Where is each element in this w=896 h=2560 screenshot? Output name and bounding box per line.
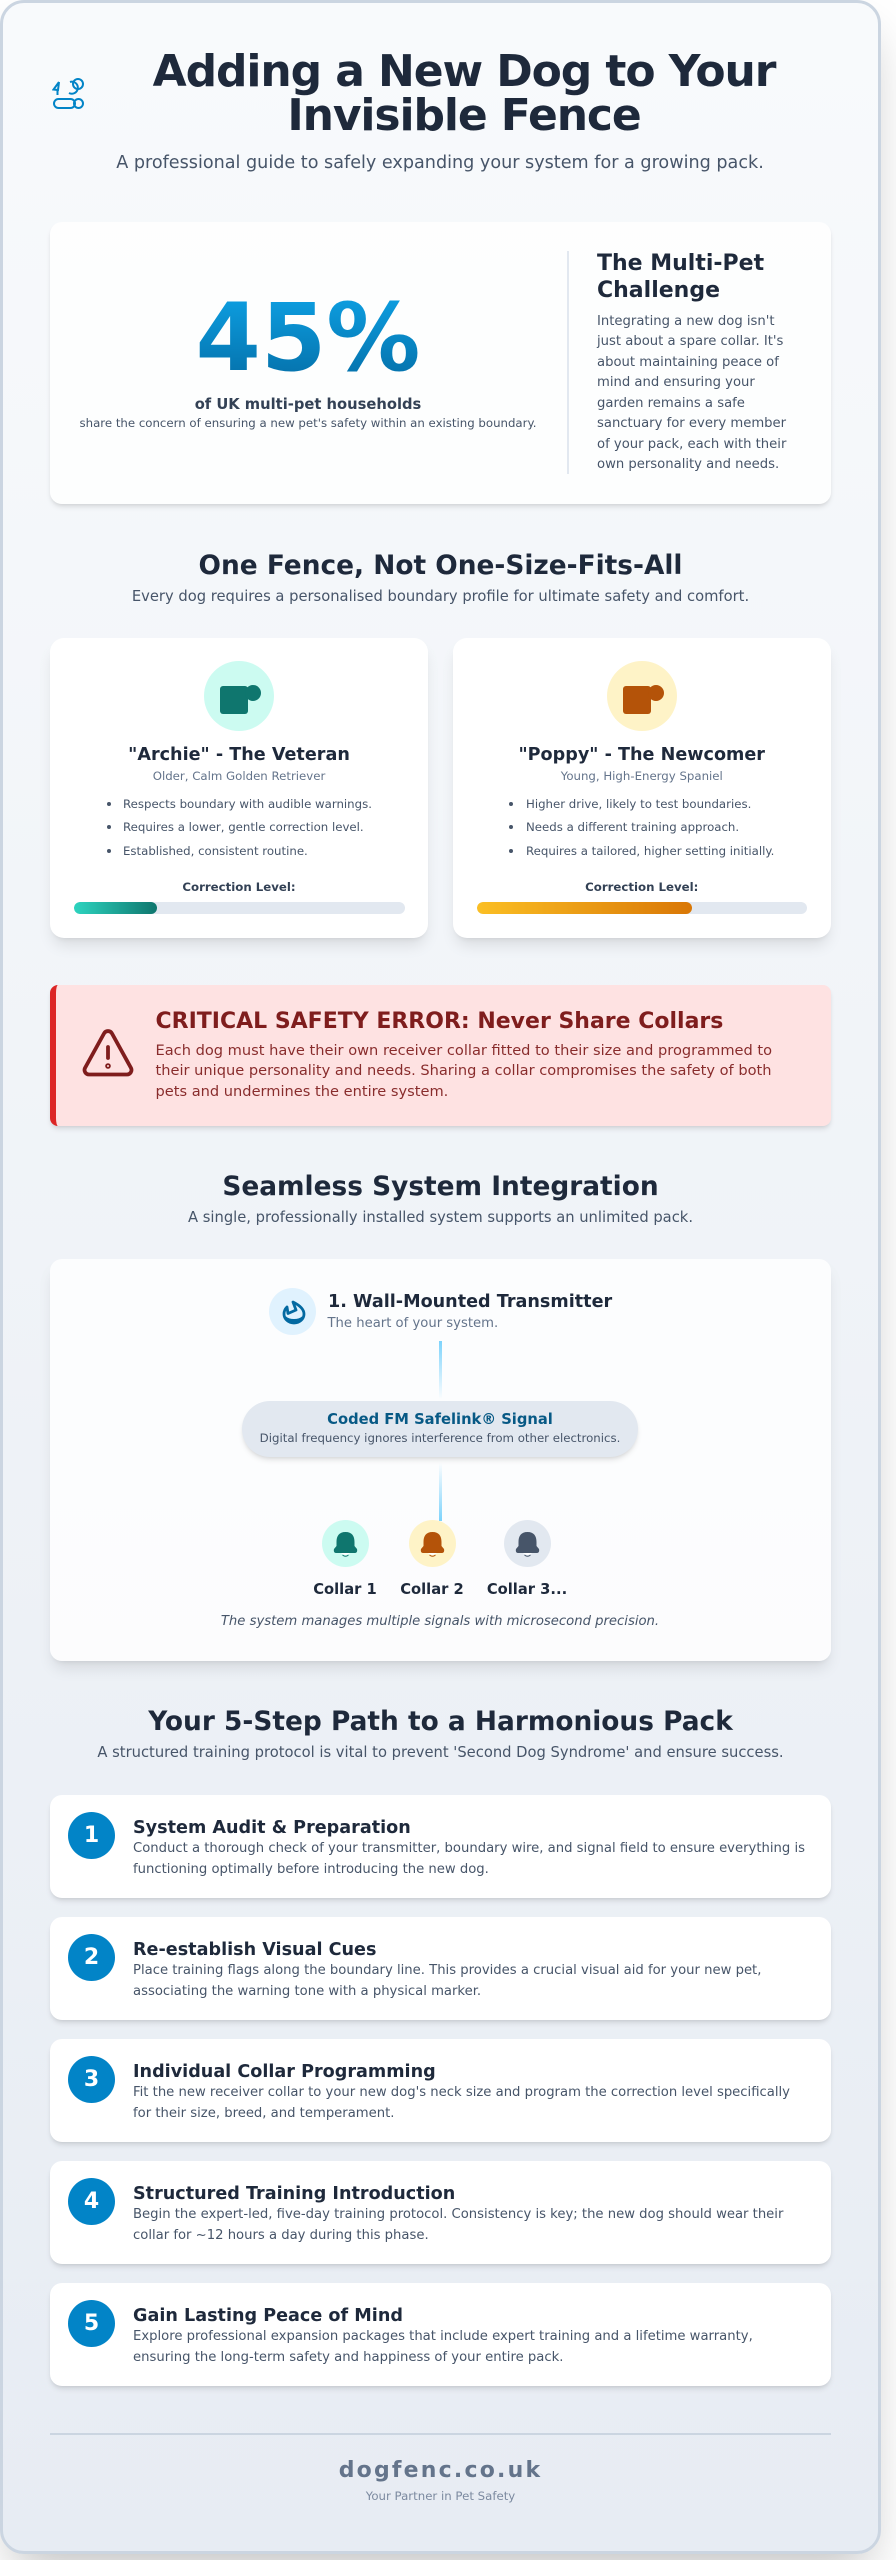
step text: Fit the new receiver collar to your new dog's neck size and program the correction level specifically <box>133 2084 790 2100</box>
icon: warning triangle <box>82 1029 134 1076</box>
section subtitle: A structured training protocol is vital to prevent 'Second Dog Syndrome' and ensure success. <box>97 1744 784 1761</box>
step text <box>133 2328 753 2364</box>
tagline: Your Partner in Pet Safety <box>366 2489 515 2503</box>
number badge <box>68 1934 115 1980</box>
challenge text: mind and ensuring your <box>597 375 755 390</box>
step text: Begin the expert-led, five-day training protocol. Consistency is key; the new dog should wear their <box>133 2206 783 2222</box>
title: Invisible Fence <box>287 90 641 141</box>
collar 3 <box>487 1520 567 1598</box>
alert text <box>156 1042 772 1100</box>
step text: Conduct a thorough check of your transmitter, boundary wire, and signal field to ensure everything is <box>133 1840 805 1856</box>
challenge text: own personality and needs. <box>597 457 779 472</box>
challenge text: garden remains a safe <box>597 396 745 410</box>
alert text: Each dog must have their own receiver collar fitted to their size and programmed to <box>156 1042 772 1058</box>
panel: system diagram <box>50 1258 830 1660</box>
correction level label: Correction Level: <box>182 880 296 894</box>
collar 2 <box>400 1520 464 1598</box>
name: "Archie" - The Veteran <box>128 744 350 764</box>
section subtitle: A single, professionally installed system supports an unlimited pack. <box>188 1209 693 1226</box>
signal title: Coded FM Safelink® Signal <box>327 1410 553 1428</box>
number badge <box>68 2300 115 2346</box>
number badge: 5 <box>84 2310 99 2336</box>
brand: dogfenc.co.uk <box>339 2458 542 2483</box>
transmitter note: The heart of your system. <box>328 1316 498 1330</box>
correction level bar <box>477 902 807 914</box>
breed: Older, Calm Golden Retriever <box>153 768 325 782</box>
number badge <box>68 2178 115 2224</box>
title: Adding a New Dog to Your <box>153 46 775 97</box>
step text <box>133 2084 790 2120</box>
panel: statistic and challenge <box>50 222 830 504</box>
big statistic: 45% <box>196 284 420 392</box>
statistic label: of UK multi-pet households <box>195 396 421 412</box>
heading: integration: Seamless System Integration <box>222 1171 659 1202</box>
callout: safety error <box>50 984 830 1126</box>
breed: Young, High-Energy Spaniel <box>561 768 723 782</box>
signal note: Digital frequency ignores interference from other electronics. <box>260 1430 620 1444</box>
icon: dog <box>204 661 274 731</box>
icon: bell <box>409 1520 456 1566</box>
icon: transmitter <box>268 1288 316 1334</box>
traits list: Requires a tailored, higher setting initially. <box>526 844 774 858</box>
system note: The system manages multiple signals with microsecond precision. <box>221 1614 659 1628</box>
traits list: Respects boundary with audible warnings. <box>123 796 372 810</box>
arrow: signal line up <box>439 1340 442 1398</box>
traits list <box>509 796 774 858</box>
step title: Re-establish Visual Cues <box>133 1940 376 1960</box>
challenge text: of your pack, each with their <box>597 436 786 452</box>
label: Collar 2 <box>400 1580 464 1598</box>
challenge text: sanctuary for every member <box>597 416 786 431</box>
step 3 <box>50 2038 830 2142</box>
panel: Archie <box>50 638 428 938</box>
step 1 <box>50 1794 830 1898</box>
label: Collar 1 <box>313 1580 377 1598</box>
alert text: pets and undermines the entire system. <box>156 1083 448 1100</box>
arrow: signal line down <box>439 1462 442 1520</box>
icon: dogs <box>52 78 84 109</box>
traits list: Higher drive, likely to test boundaries. <box>526 796 751 810</box>
number badge: 4 <box>84 2188 99 2214</box>
step text: associating the warning tone with a physical marker. <box>133 1984 481 1998</box>
step text: functioning optimally before introducing the new dog. <box>133 1862 489 1876</box>
icon: bell <box>322 1520 368 1566</box>
step text: for their size, breed, and temperament. <box>133 2106 394 2120</box>
title <box>152 46 776 141</box>
challenge heading: Challenge <box>597 278 720 302</box>
number badge <box>68 1812 115 1858</box>
number badge: 1 <box>84 1822 99 1848</box>
challenge text: just about a spare collar. It's <box>597 334 783 349</box>
subtitle: A professional guide to safely expanding your system for a growing pack. <box>116 152 764 172</box>
footer <box>339 2458 542 2503</box>
step 4 <box>50 2160 830 2264</box>
step title: System Audit & Preparation <box>133 1818 411 1838</box>
name: "Poppy" - The Newcomer <box>518 744 765 764</box>
panel: Poppy <box>453 638 830 938</box>
step title: Gain Lasting Peace of Mind <box>133 2306 403 2326</box>
traits list <box>107 796 372 858</box>
heading: 5 steps: Your 5-Step Path to a Harmonious Pack <box>148 1706 733 1737</box>
transmitter title: 1. Wall-Mounted Transmitter <box>328 1292 612 1312</box>
traits list: Requires a lower, gentle correction level. <box>123 820 364 834</box>
challenge text: Integrating a new dog isn't <box>597 314 775 328</box>
step text: Place training flags along the boundary line. This provides a crucial visual aid for your new pet, <box>133 1962 761 1978</box>
challenge heading <box>597 250 764 302</box>
step 2 <box>50 1916 830 2020</box>
challenge text <box>596 314 786 472</box>
traits list: Established, consistent routine. <box>123 844 308 858</box>
step text: collar for ~12 hours a day during this phase. <box>133 2228 429 2242</box>
number badge: 2 <box>84 1944 99 1970</box>
step text <box>133 2206 784 2242</box>
step title: Structured Training Introduction <box>133 2184 455 2204</box>
step text: ensuring the long-term safety and happiness of your entire pack. <box>133 2350 563 2364</box>
step title: Individual Collar Programming <box>133 2062 436 2082</box>
step text <box>133 1962 761 1998</box>
step text: Explore professional expansion packages that include expert training and a lifetime warranty, <box>133 2328 753 2344</box>
correction level label: Correction Level: <box>585 880 698 894</box>
icon: bell <box>504 1520 550 1566</box>
collar 1 <box>313 1520 377 1598</box>
correction level bar <box>74 902 405 914</box>
label: Collar 3... <box>487 1580 567 1598</box>
challenge text: about maintaining peace of <box>597 354 779 370</box>
challenge heading: The Multi-Pet <box>597 250 764 276</box>
heading: one fence: One Fence, Not One-Size-Fits-All <box>199 550 682 580</box>
signal pill <box>242 1400 638 1456</box>
number badge: 3 <box>84 2066 99 2092</box>
traits list: Needs a different training approach. <box>526 820 739 834</box>
icon: dog <box>607 661 677 731</box>
alert text: their unique personality and needs. Sharing a collar compromises the safety of both <box>156 1062 772 1079</box>
big statistic <box>50 282 566 394</box>
number badge <box>68 2056 115 2102</box>
step 5 <box>50 2282 830 2386</box>
step text <box>133 1840 805 1876</box>
section subtitle: Every dog requires a personalised boundary profile for ultimate safety and comfort. <box>132 588 749 604</box>
statistic description: share the concern of ensuring a new pet's safety within an existing boundary. <box>80 416 536 430</box>
alert heading: CRITICAL SAFETY ERROR: Never Share Collars <box>156 1009 723 1034</box>
header <box>52 46 776 172</box>
